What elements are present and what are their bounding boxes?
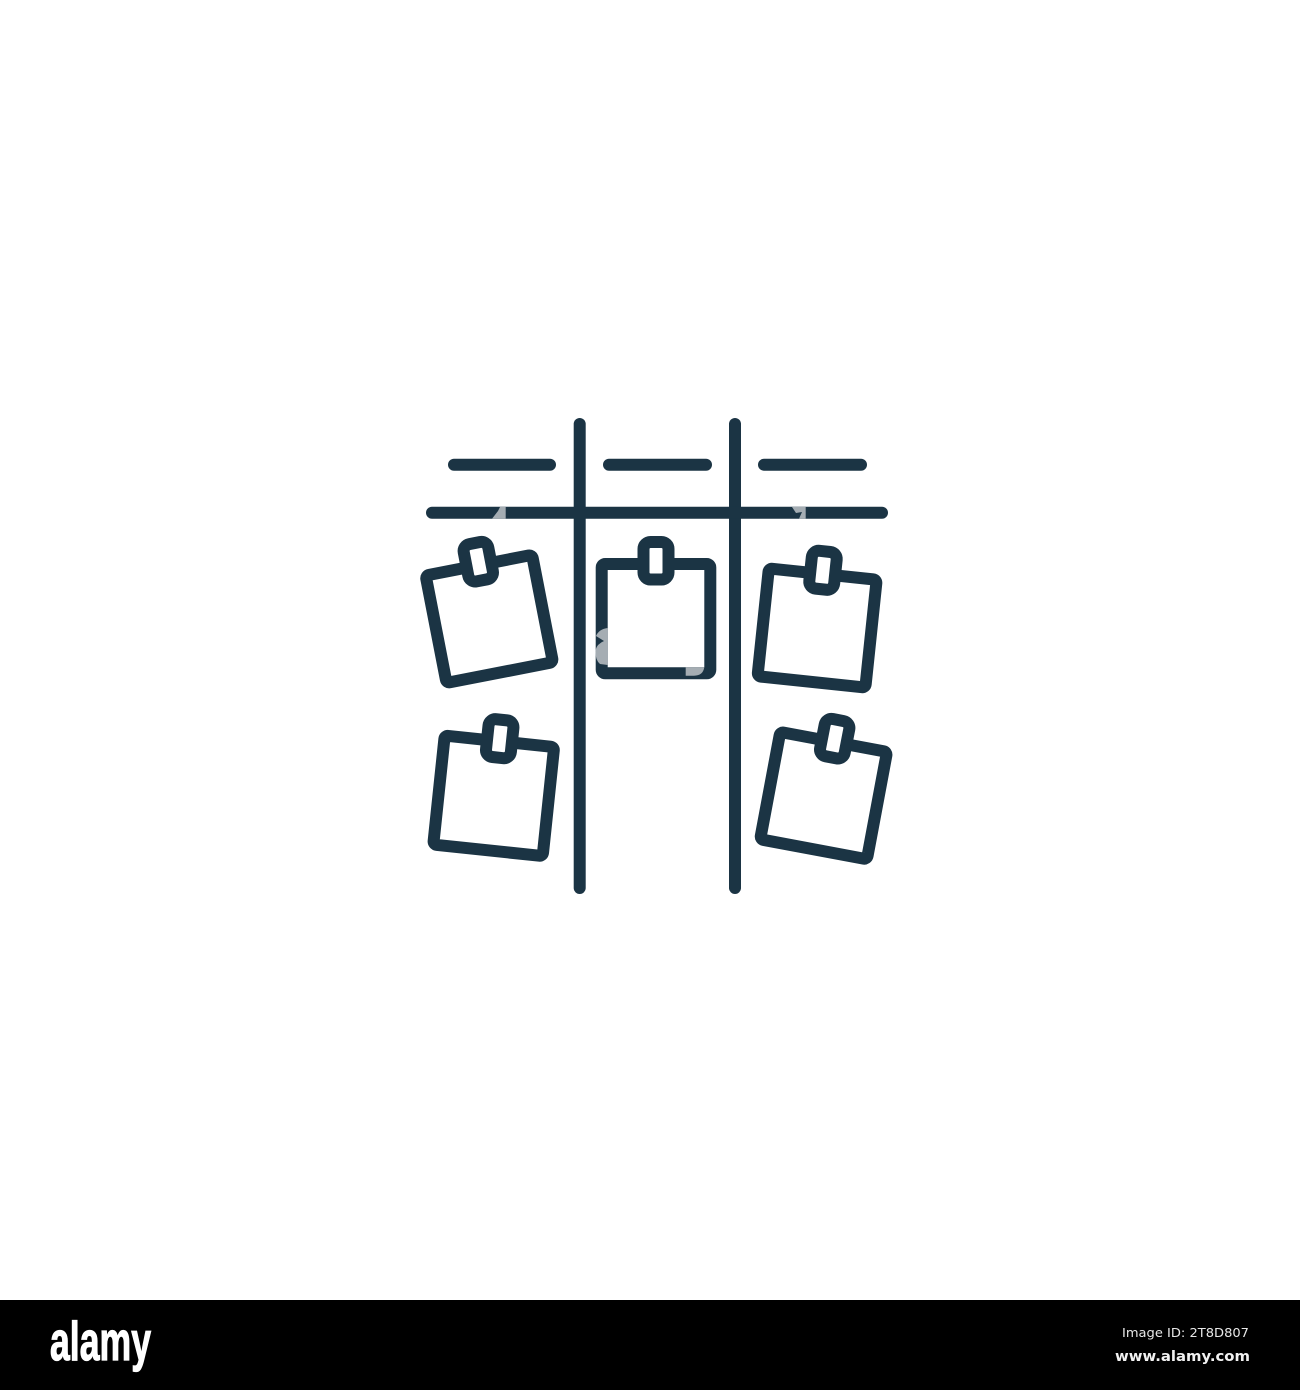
sticky note: top left [426,541,553,683]
sticky note: top right [758,550,877,688]
image id: Image ID: 2T8D807 [1122,1326,1249,1341]
footer bar [0,1300,1300,1390]
column header: left [454,459,550,471]
sticky note: bottom right [760,718,887,859]
sticky note: top middle [602,542,710,673]
column header: middle [609,459,706,471]
watermark fragments over the icon [492,507,806,676]
board grid lines [432,424,882,888]
sticky note: bottom left [433,718,554,856]
column header: right [764,459,861,471]
website url: www.alamy.com [1115,1348,1250,1365]
logo: alamy: alamy [50,1310,151,1372]
icon: kanban board [426,424,887,888]
